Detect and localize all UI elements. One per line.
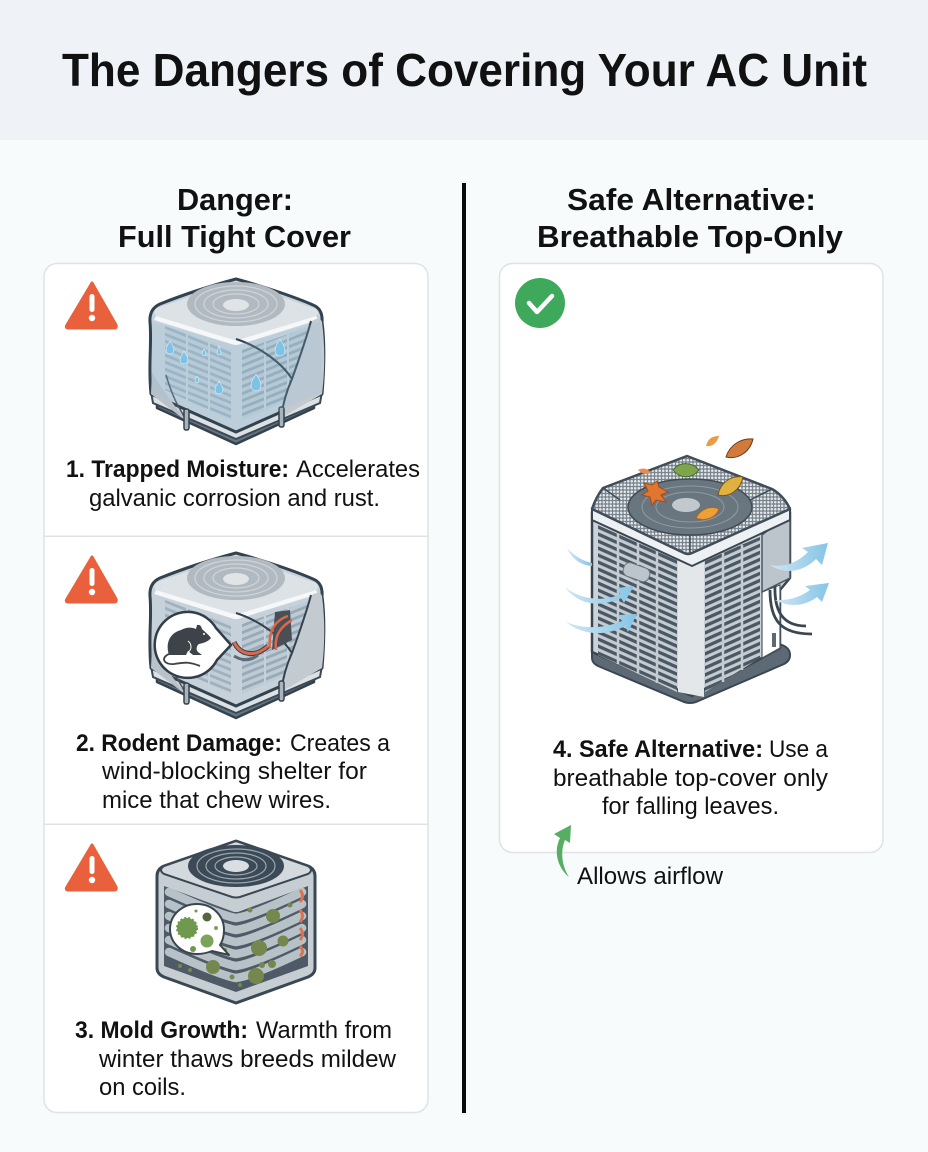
text: mold growth: Warmth from [256, 1017, 392, 1044]
heading: danger: Danger: [177, 182, 293, 217]
callout: allows airflow: Allows airflow [577, 863, 724, 890]
title: The Dangers of Covering Your AC Unit [62, 44, 867, 96]
panel: rodent damage [66, 553, 391, 814]
icon: warning triangle [66, 557, 116, 602]
text: mold growth: winter thaws breeds mildew [98, 1046, 397, 1073]
arrows: airflow [565, 543, 829, 633]
panel: mold growth [66, 841, 397, 1101]
text: safe alternative [553, 736, 829, 820]
heading: danger: Full Tight Cover [118, 219, 351, 254]
text: rodent damage: Creates a [290, 730, 391, 757]
icon: green check [515, 278, 565, 328]
text: rodent damage: wind-blocking shelter for [101, 758, 367, 785]
icon: warning triangle [66, 283, 116, 328]
text: rodent damage: 2. Rodent Damage: [76, 730, 282, 757]
text: safe alternative: Use a [769, 736, 829, 763]
panel: danger card [44, 264, 428, 1112]
illustration: covered AC unit with rodent [150, 553, 324, 718]
panel: safe alternative card [500, 264, 883, 852]
heading: safe alternative: Safe Alternative: [567, 182, 816, 217]
illustration: covered AC unit with moisture [150, 279, 324, 444]
header band [0, 0, 928, 140]
arrow: green curved [554, 825, 571, 877]
text: trapped moisture [66, 456, 420, 512]
heading: safe alternative [537, 182, 844, 254]
text: safe alternative: for falling leaves. [602, 793, 779, 820]
text: safe alternative: breathable top-cover only [553, 765, 828, 792]
icon: leaves [638, 436, 753, 520]
heading: safe alternative: Breathable Top-Only [537, 219, 844, 254]
text: trapped moisture: 1. Trapped Moisture: [66, 456, 289, 483]
text: safe alternative: 4. Safe Alternative: [553, 736, 763, 763]
text: trapped moisture: galvanic corrosion and rust. [89, 485, 380, 512]
illustration: AC unit with moldy coils [157, 841, 315, 1003]
text: mold growth: 3. Mold Growth: [75, 1017, 248, 1044]
text: rodent damage [76, 730, 391, 814]
text: trapped moisture: Accelerates [296, 456, 420, 483]
center divider [462, 183, 466, 1113]
icon: mold speech bubble [170, 904, 229, 955]
icon: warning triangle [66, 845, 116, 890]
text: mold growth [75, 1017, 397, 1101]
icon: rodent speech bubble [155, 612, 231, 678]
illustration: AC unit with breathable top cover [565, 436, 829, 703]
text: rodent damage: mice that chew wires. [102, 787, 331, 814]
heading: danger [118, 182, 351, 254]
panel: trapped moisture [66, 279, 420, 512]
text: mold growth: on coils. [99, 1074, 186, 1101]
